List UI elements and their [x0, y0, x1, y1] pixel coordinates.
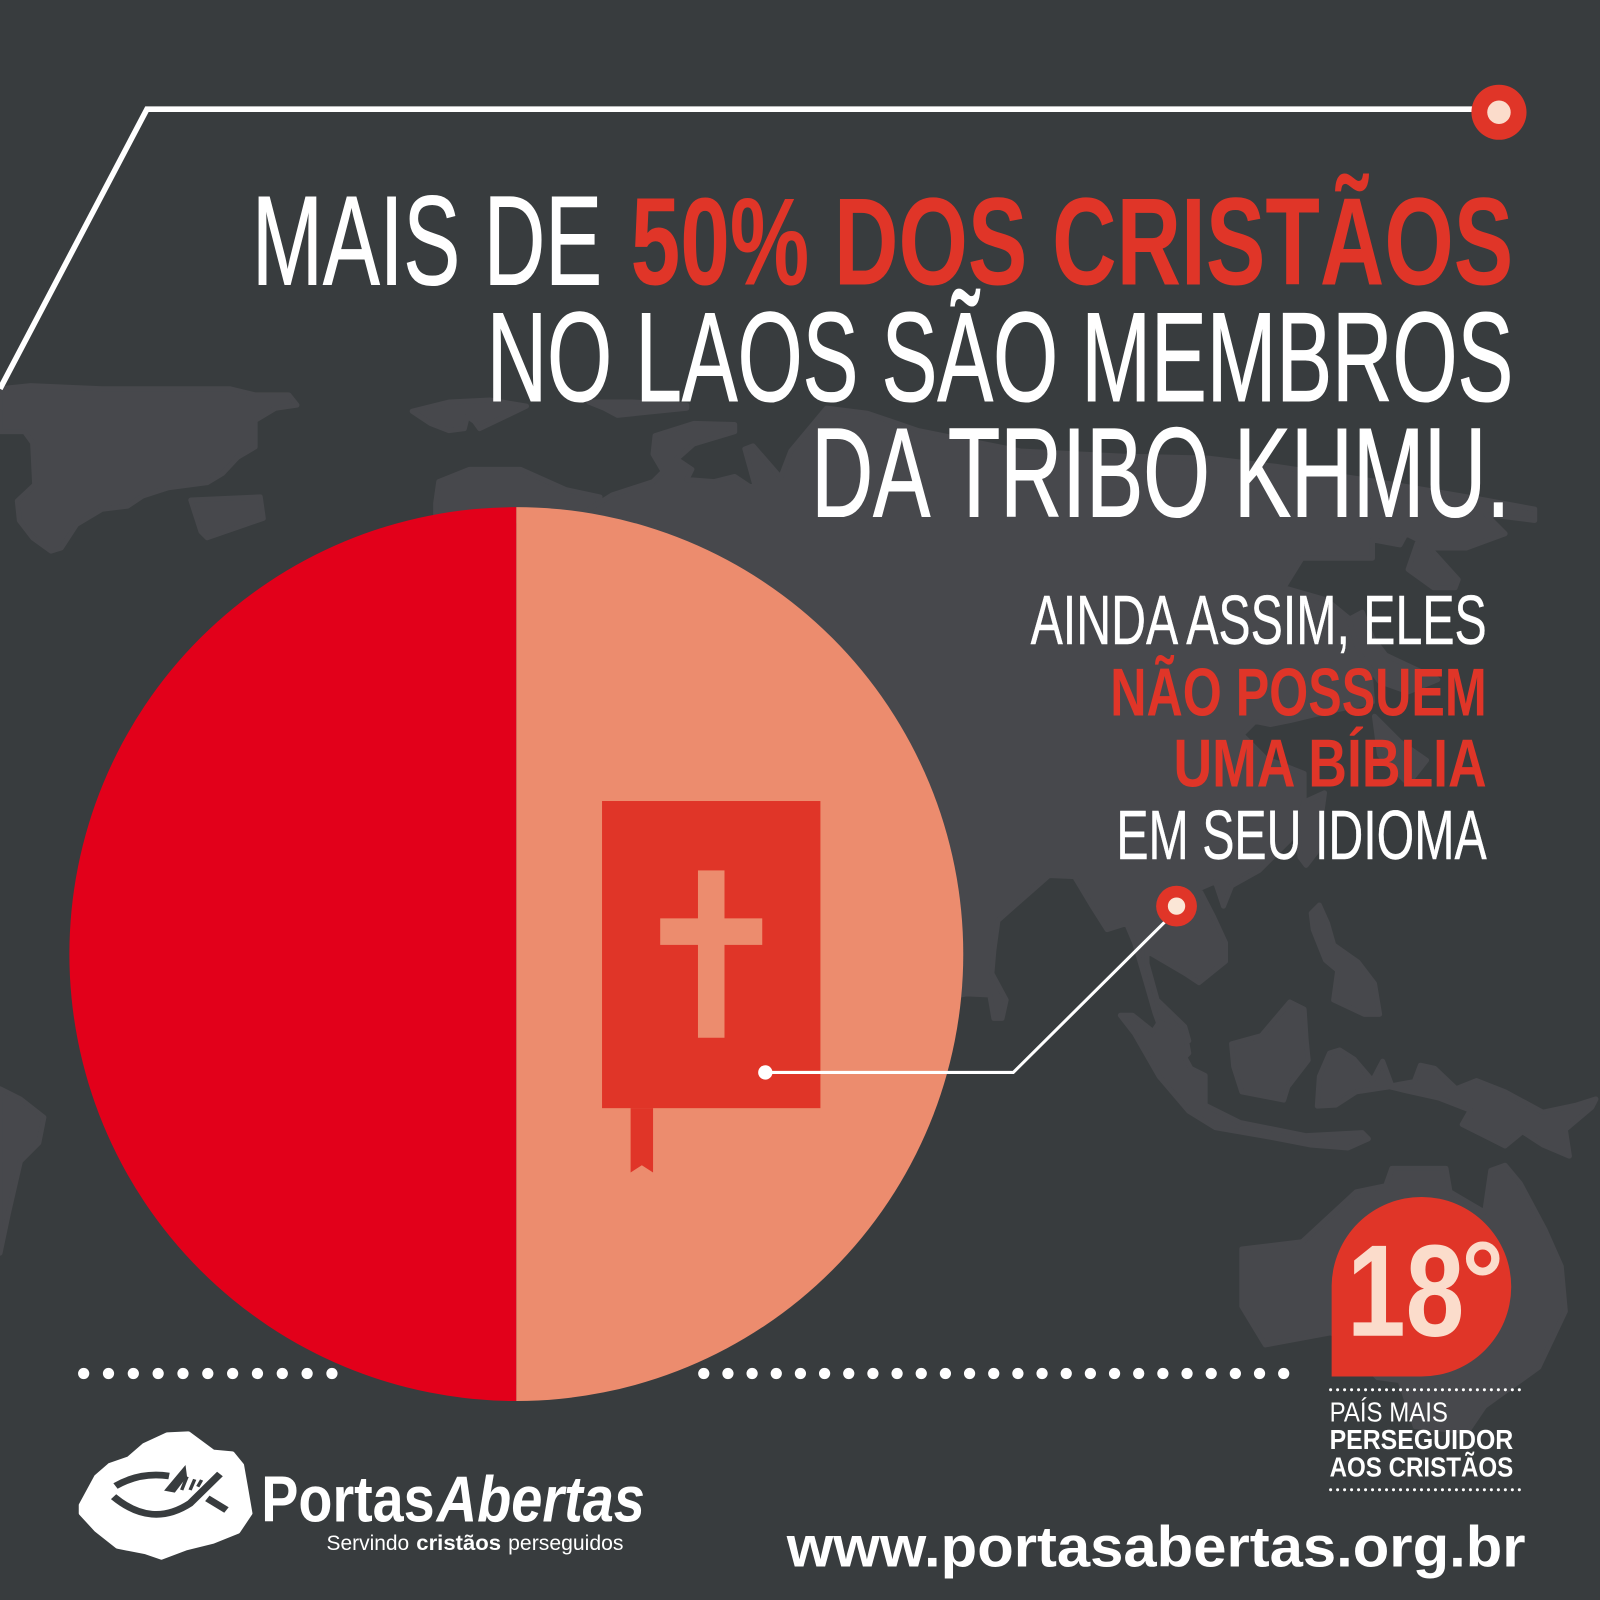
- tagline: [327, 1531, 623, 1555]
- pie chart 50 percent: [69, 507, 963, 1401]
- badge: rank 18: [1332, 1197, 1511, 1377]
- subtext: UMA BÍBLIA: [1173, 727, 1487, 802]
- tagline: cristãos: [416, 1531, 501, 1555]
- badge caption: [1330, 1390, 1519, 1490]
- badge caption: AOS CRISTÃOS: [1330, 1452, 1513, 1483]
- wordmark: Portas: [261, 1462, 435, 1535]
- badge caption: PERSEGUIDOR: [1330, 1424, 1513, 1455]
- title: MAIS DE: [252, 171, 602, 313]
- world map silhouette: [0, 386, 1596, 1432]
- logo: Portas Abertas: Abertas: [435, 1462, 645, 1535]
- icon: bible: [602, 801, 820, 1172]
- badge caption: PAÍS MAIS: [1330, 1396, 1448, 1427]
- callout line from bible to Laos pin: [758, 886, 1197, 1080]
- title: [252, 171, 1513, 544]
- tagline: perseguidos: [508, 1531, 623, 1555]
- website url: www.portasabertas.org.br: [786, 1515, 1526, 1579]
- top connector line with pin: [0, 85, 1527, 389]
- badge: rank 18: °: [1461, 1219, 1504, 1342]
- dotted divider right: [704, 1368, 1286, 1379]
- icon: fish on white rock: [81, 1433, 250, 1558]
- subtext: [1031, 581, 1487, 874]
- badge: rank 18: 18: [1347, 1218, 1464, 1364]
- tagline: Servindo: [327, 1531, 409, 1555]
- logo: Portas Abertas: [81, 1433, 645, 1558]
- dotted divider left: [84, 1368, 334, 1379]
